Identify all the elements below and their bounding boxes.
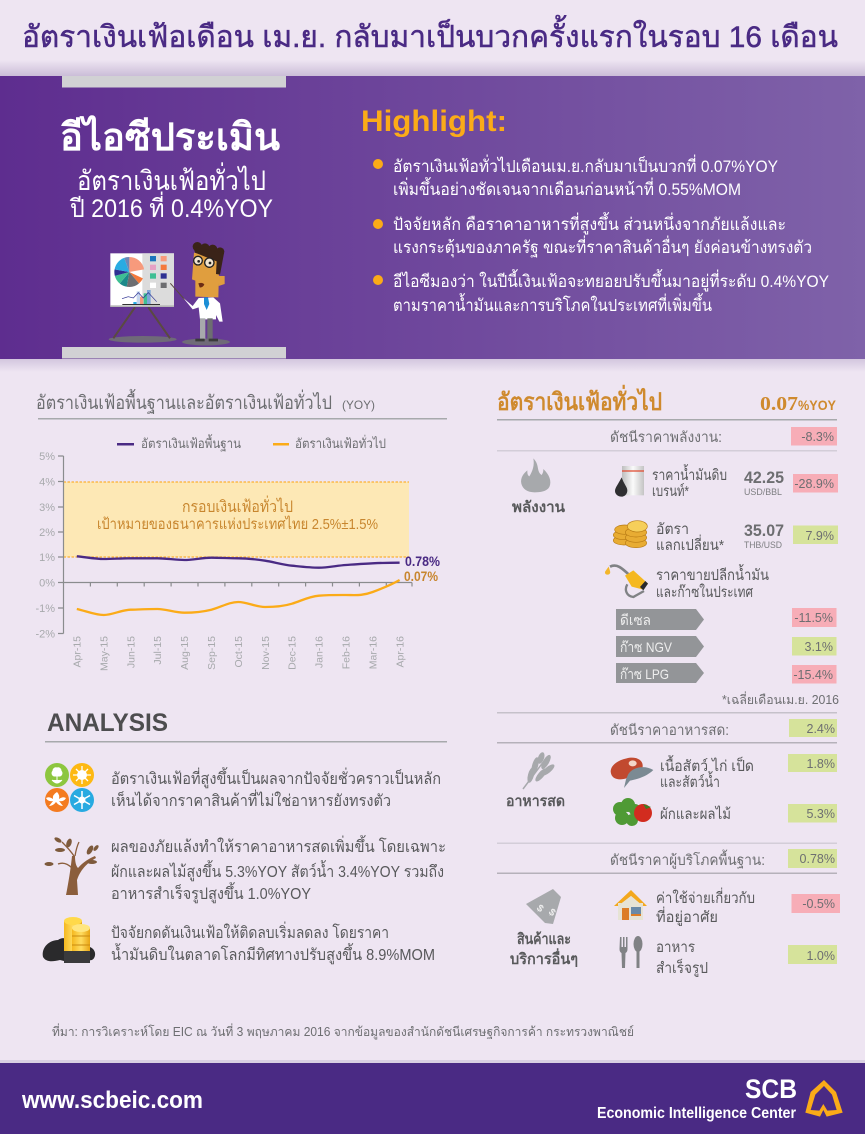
- row: NGV: [616, 636, 836, 657]
- heading: EIC forecast: [60, 115, 280, 223]
- row: diesel: ดีเซล: [620, 612, 651, 628]
- panel: headline inflation breakdown: [497, 384, 840, 977]
- text: housing: [656, 887, 840, 926]
- axes: [58, 456, 412, 634]
- text: vegetables: 5.3%: [806, 807, 835, 821]
- text: prepared food: [656, 939, 837, 977]
- y axis labels: 3%: [39, 502, 55, 514]
- text: brent: USD/BBL: [744, 487, 782, 498]
- label: goods and services: บริการอื่นๆ: [510, 948, 578, 968]
- heading: Highlight: Highlight:: [361, 105, 507, 138]
- text: drought effect: ผลของภัยแล้งทำให้ราคาอาหารสดเพิ่มขึ้น โดยเฉพาะ: [111, 835, 446, 856]
- row: NGV: 3.1%: [804, 640, 833, 654]
- analysis heading: ANALYSIS: [47, 709, 168, 737]
- highlight bullets: อัตราเงินเฟ้อทั่วไปเดือนเม.ย.กลับมาเป็นบวกที่ 0.07%YOY: [393, 154, 778, 176]
- text: retail fuel: ราคาขายปลีกน้ำมัน: [656, 564, 769, 584]
- row: LPG: -15.4%: [793, 668, 833, 682]
- core index row: 0.78%: [800, 852, 835, 866]
- text: prepared food: 1.0%: [806, 949, 835, 963]
- text: vegetables: ผักและผลไม้: [660, 805, 731, 823]
- highlight bullets: [373, 154, 829, 315]
- breakdown heading: อัตราเงินเฟ้อทั่วไป: [497, 384, 662, 416]
- x axis labels: Feb-16: [340, 636, 352, 669]
- text: brent: เบรนท์*: [652, 483, 689, 500]
- text: deflation pressure: [111, 921, 435, 965]
- icon: price tag: [526, 889, 561, 924]
- highlight bullets: ปัจจัยหลัก คือราคาอาหารที่สูงขึ้น ส่วนหนึ่งจากภัยแล้งและ: [393, 212, 786, 235]
- text: retail fuel: [656, 564, 769, 601]
- headline inflation line: [77, 580, 400, 615]
- icon: oil barrels: [43, 917, 95, 963]
- energy index row: ดัชนีราคาพลังงาน:: [610, 429, 722, 446]
- y axis labels: 2%: [39, 527, 55, 539]
- chart heading: [36, 389, 447, 420]
- row: NGV: ก๊าซ NGV: [620, 639, 673, 655]
- x axis labels: May-15: [98, 636, 110, 671]
- text: drought effect: อาหารสำเร็จรูปสูงขึ้น 1.0%YOY: [111, 882, 311, 904]
- row: diesel: [616, 608, 836, 630]
- heading: EIC forecast: อัตราเงินเฟ้อทั่วไป: [77, 162, 266, 196]
- text: exchange rate: THB/USD: [744, 540, 782, 551]
- icon: fork and spoon: [620, 936, 642, 968]
- section: core goods and services: [497, 849, 840, 977]
- icon: dry tree: [44, 836, 100, 895]
- x axis labels: Dec-15: [287, 636, 299, 670]
- icon: coins: [613, 521, 647, 548]
- breakdown heading: [497, 384, 837, 420]
- SCB wordmark: SCB: [745, 1074, 797, 1104]
- row: LPG: ก๊าซ LPG: [620, 666, 669, 682]
- y axis labels: [35, 451, 55, 640]
- breakdown heading: %YOY: [798, 397, 837, 413]
- text: deflation pressure: ปัจจัยกดดันเงินเฟ้อให้ติดลบเริ่มลดลง โดยราคา: [111, 921, 389, 942]
- text: retail fuel: และก๊าซในประเทศ: [656, 583, 753, 601]
- text: brent: [652, 464, 838, 500]
- text: drought effect: [111, 835, 446, 904]
- highlight bullets: เพิ่มขึ้นอย่างชัดเจนจากเดือนก่อนหน้าที่ 0.55%MOM: [393, 177, 741, 199]
- target band: เป้าหมายของธนาคารแห่งประเทศไทย 2.5%±1.5%: [97, 515, 378, 533]
- x axis labels: Jul-15: [152, 636, 164, 665]
- text: prepared food: อาหาร: [656, 939, 695, 956]
- text: drought effect: ผักและผลไม้สูงขึ้น 5.3%YOY สัตว์น้ำ 3.4%YOY รวมถึง: [111, 860, 444, 882]
- icon: price tag: $: [546, 907, 558, 919]
- source note: ที่มา: การวิเคราะห์โดย EIC ณ วันที่ 3 พฤษภาคม 2016 จากข้อมูลของสำนักดัชนีเศรษฐกิจการค้า กระทรวงพาณิชย์: [52, 1023, 634, 1040]
- icon: grain: [523, 751, 556, 789]
- icon: oil can: [615, 466, 644, 497]
- label: fresh food: อาหารสด: [506, 793, 565, 810]
- text: temporary factors: [111, 767, 441, 810]
- x axis labels: Apr-16: [394, 636, 406, 668]
- x axis labels: Apr-15: [72, 636, 84, 668]
- label: goods and services: สินค้าและ: [517, 930, 571, 948]
- x axis labels: Nov-15: [260, 636, 272, 670]
- energy index row: -8.3%: [801, 430, 834, 444]
- text: meat: เนื้อสัตว์ ไก่ เป็ด: [660, 755, 754, 775]
- target band: [64, 482, 409, 557]
- fresh food index row: [497, 719, 837, 744]
- core index row: [497, 849, 837, 874]
- value labels: 0.78%: [405, 554, 440, 569]
- section: energy: [497, 427, 839, 714]
- heading: EIC forecast: อีไอซีประเมิน: [60, 115, 280, 159]
- y axis labels: -2%: [35, 628, 55, 640]
- line chart: core and headline inflation: [35, 434, 440, 671]
- core index row: ดัชนีราคาผู้บริโภคพื้นฐาน:: [610, 849, 765, 869]
- x axis labels: Mar-16: [367, 636, 379, 669]
- SCB wordmark: [597, 1074, 797, 1122]
- highlight bullets: อีไอซีมองว่า ในปีนี้เงินเฟ้อจะทยอยปรับขึ้นมาอยู่ที่ระดับ 0.4%YOY: [393, 269, 829, 292]
- x axis labels: Oct-15: [233, 636, 245, 668]
- highlight bullets: แรงกระตุ้นของภาครัฐ ขณะที่ราคาสินค้าอื่นๆ ยังค่อนข้างทรงตัว: [393, 235, 812, 258]
- icon: presenter with chart board: [109, 242, 230, 345]
- text: meat: และสัตว์น้ำ: [660, 771, 720, 791]
- heading: EIC forecast: ปี 2016 ที่ 0.4%YOY: [69, 191, 273, 223]
- icon: house: [614, 890, 647, 920]
- y axis labels: 4%: [39, 476, 55, 488]
- x axis labels: [72, 636, 406, 671]
- text: vegetables: [660, 804, 837, 823]
- icon: vegetables: [613, 798, 652, 826]
- label: energy: พลังงาน: [512, 499, 566, 516]
- footnote: *เฉลี่ยเดือนเม.ย. 2016: [722, 691, 839, 707]
- text: prepared food: สำเร็จรูป: [656, 958, 708, 977]
- chart heading: (YOY): [342, 398, 375, 412]
- text: meat: 1.8%: [806, 757, 835, 771]
- panel: purple summary band: [0, 60, 865, 372]
- text: brent: 42.25: [744, 468, 784, 487]
- text: temporary factors: อัตราเงินเฟ้อที่สูงขึ้นเป็นผลจากปัจจัยชั่วคราวเป็นหลัก: [111, 767, 441, 789]
- icon: four seasons: [45, 763, 94, 812]
- energy index row: [497, 427, 837, 452]
- website: www.scbeic.com: [21, 1087, 203, 1114]
- breakdown heading: 0.07: [760, 393, 798, 415]
- text: housing: -0.5%: [802, 897, 835, 911]
- icon: SCB logo: [805, 1080, 843, 1117]
- chart heading: อัตราเงินเฟ้อพื้นฐานและอัตราเงินเฟ้อทั่วไป: [36, 389, 332, 414]
- text: exchange rate: 7.9%: [806, 529, 834, 543]
- SCB wordmark: Economic Intelligence Center: [597, 1105, 796, 1122]
- row: diesel: -11.5%: [794, 611, 833, 625]
- highlight bullets: ตามราคาน้ำมันและการบริโภคในประเทศที่เพิ่มขึ้น: [393, 293, 712, 315]
- icon: fuel nozzle: [605, 566, 648, 597]
- text: exchange rate: แลกเปลี่ยน*: [656, 534, 724, 554]
- y axis labels: -1%: [35, 603, 55, 615]
- y axis labels: 5%: [39, 451, 55, 463]
- text: exchange rate: อัตรา: [656, 521, 689, 538]
- x axis labels: Jun-15: [125, 636, 137, 668]
- core inflation line: [77, 556, 400, 568]
- text: exchange rate: [656, 521, 838, 554]
- chart legend: อัตราเงินเฟ้อพื้นฐาน: [141, 434, 241, 452]
- text: brent: -28.9%: [794, 477, 834, 491]
- label: goods and services: [510, 930, 578, 968]
- x axis labels: Aug-15: [179, 636, 191, 670]
- line chart: core and headline inflation: 0.07%: [404, 569, 438, 584]
- target band: กรอบเงินเฟ้อทั่วไป: [182, 495, 293, 516]
- chart legend: อัตราเงินเฟ้อทั่วไป: [295, 435, 386, 451]
- text: exchange rate: 35.07: [744, 521, 784, 540]
- text: housing: ที่อยู่อาศัย: [656, 906, 718, 926]
- text: meat: [660, 754, 837, 791]
- x axis labels: Sep-15: [206, 636, 218, 670]
- chart legend: [117, 434, 386, 452]
- fresh food index row: 2.4%: [806, 722, 835, 736]
- x axis labels: Jan-16: [314, 636, 326, 668]
- fresh food index row: ดัชนีราคาอาหารสด:: [610, 722, 729, 739]
- icon: price tag: $: [534, 903, 546, 915]
- y axis labels: 1%: [39, 552, 55, 564]
- title: อัตราเงินเฟ้อเดือน เม.ย. กลับมาเป็นบวกครั้งแรกในรอบ 16 เดือน: [22, 15, 838, 54]
- footer: [0, 1060, 865, 1134]
- panel: analysis: [43, 709, 447, 965]
- y axis labels: 0%: [39, 578, 55, 590]
- text: temporary factors: เห็นได้จากราคาสินค้าที่ไม่ใช่อาหารยังทรงตัว: [111, 789, 391, 810]
- text: deflation pressure: น้ำมันดิบในตลาดโลกมีทิศทางปรับสูงขึ้น 8.9%MOM: [111, 943, 435, 965]
- row: LPG: [616, 663, 836, 684]
- icon: meat and fish: [611, 758, 653, 788]
- text: brent: ราคาน้ำมันดิบ: [652, 464, 727, 484]
- text: housing: ค่าใช้จ่ายเกี่ยวกับ: [656, 887, 755, 907]
- icon: flame: [521, 458, 550, 492]
- section: fresh food: [497, 719, 837, 844]
